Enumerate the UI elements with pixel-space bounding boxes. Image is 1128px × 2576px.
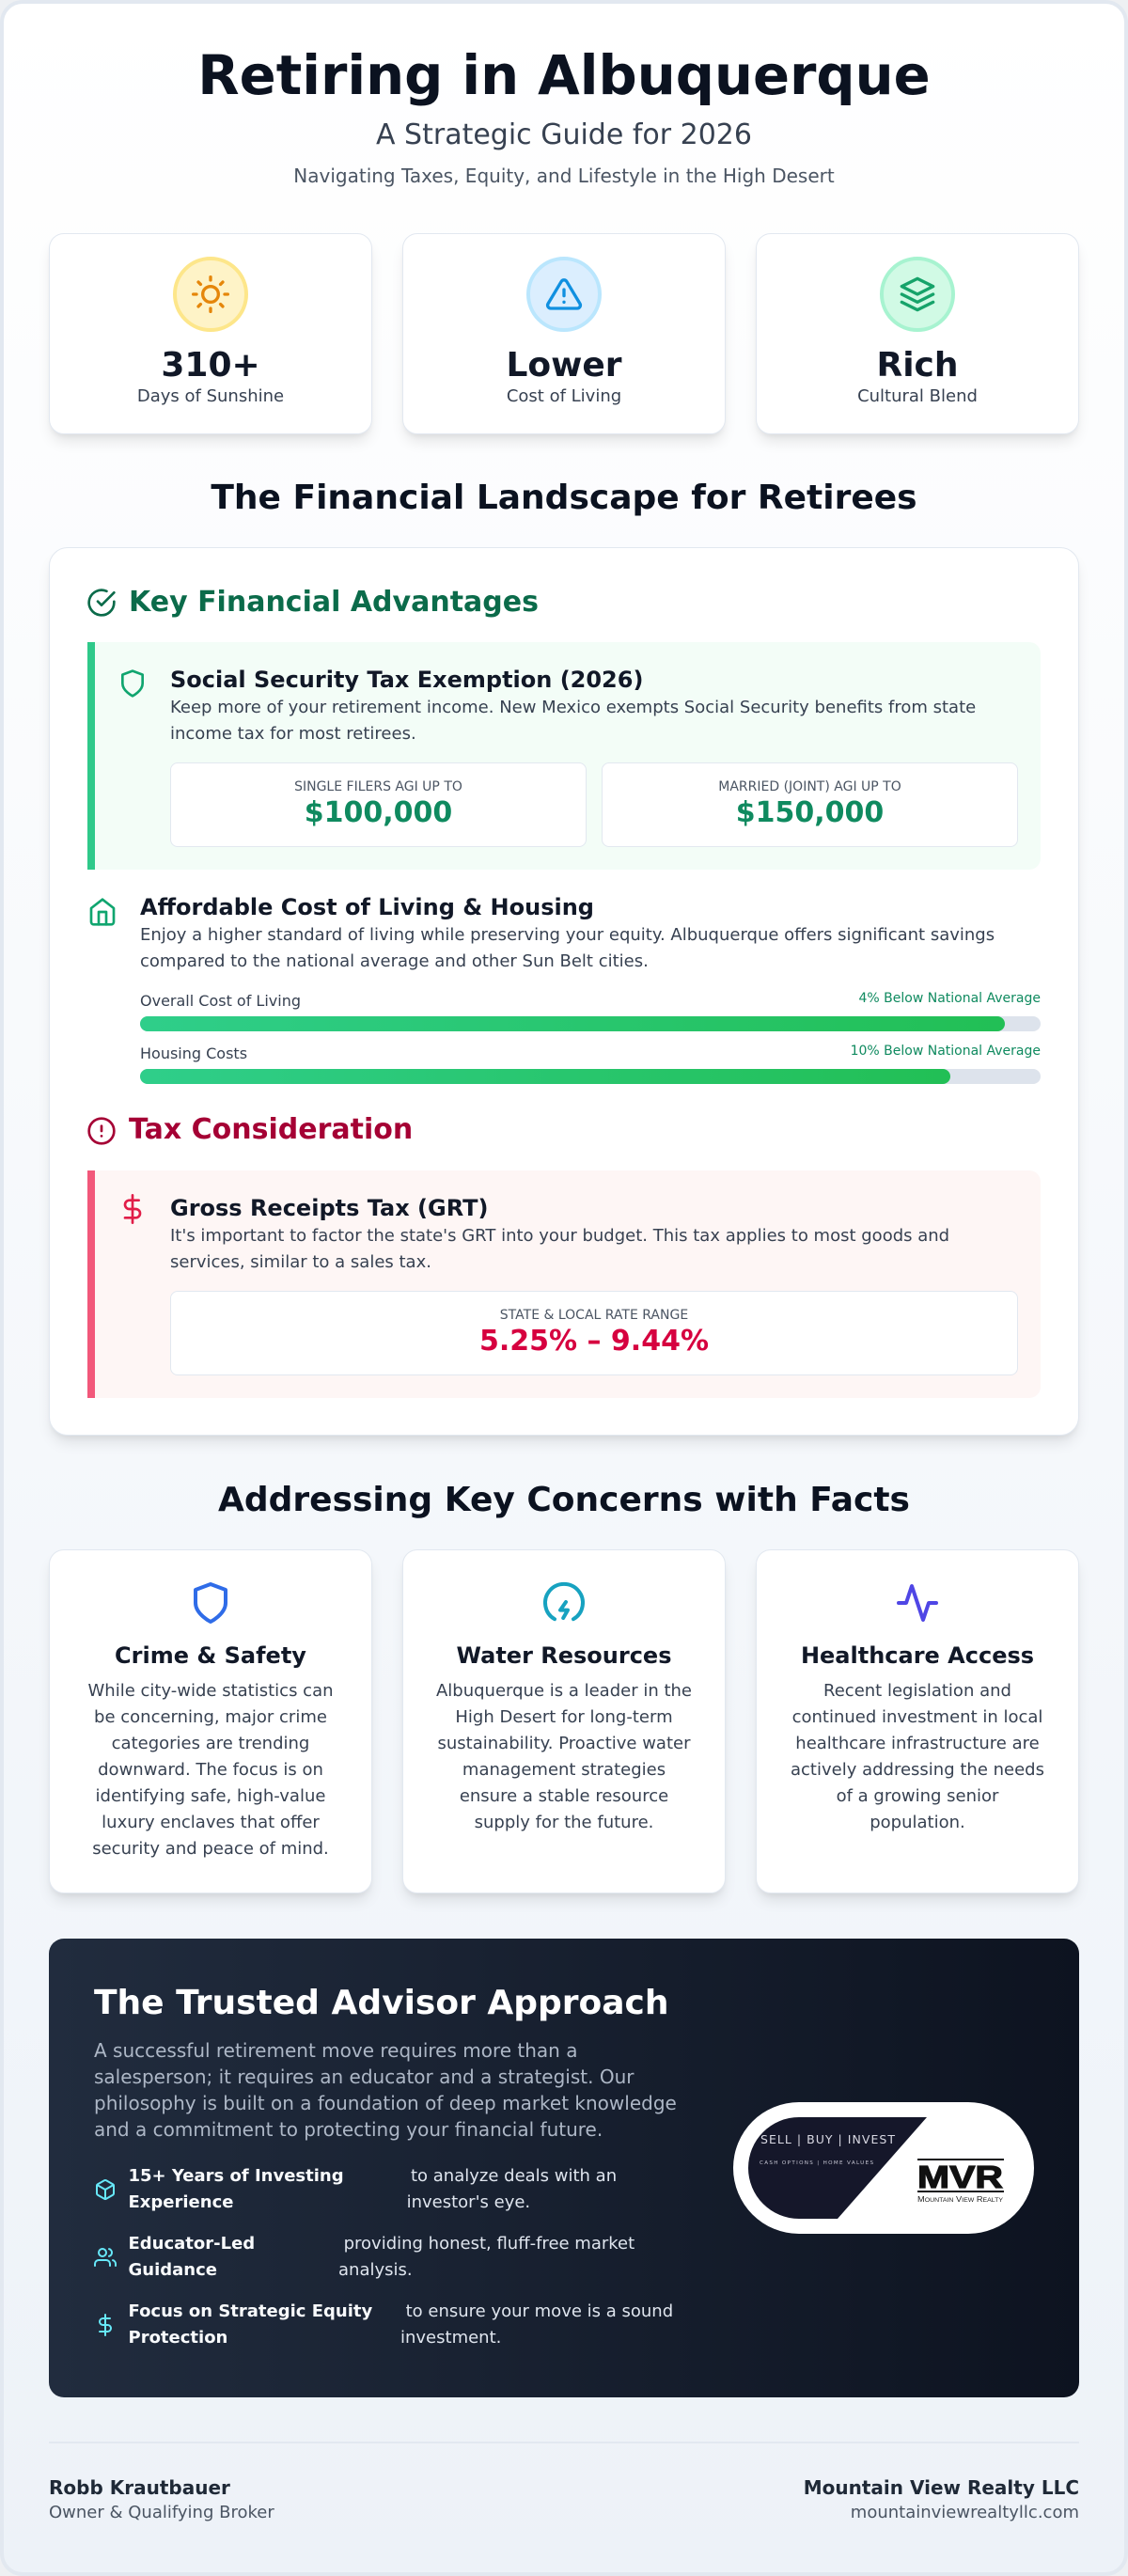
bold text: Focus on Strategic Equity	[128, 2301, 372, 2321]
icon: layers	[880, 257, 955, 332]
panel: sunshine stat	[49, 233, 372, 434]
bold text	[128, 2234, 255, 2280]
text: investment.	[400, 2328, 501, 2348]
card text: healthcare: actively addressing the needs	[791, 1760, 1044, 1780]
text	[338, 2234, 634, 2280]
bar label: housing: Housing Costs	[140, 1045, 247, 1062]
bold text: Protection	[128, 2328, 227, 2348]
text: analysis.	[338, 2260, 413, 2280]
icon: check circle	[87, 589, 116, 617]
heading: financial landscape: The Financial Landscape for Retirees	[211, 479, 917, 517]
panel: social security exemption	[87, 642, 1041, 870]
logo: mountain view realty: SELL | BUY | INVEST	[760, 2132, 895, 2146]
card text: crime: be concerning, major crime	[94, 1707, 327, 1727]
label: married joint: MARRIED (JOINT) AGI UP TO	[718, 779, 901, 794]
card text: crime: downward. The focus is on	[98, 1760, 323, 1780]
bar: overall cost 96%	[140, 1016, 1041, 1031]
logo: mountain view realty: Mountain View Realty	[917, 2195, 1003, 2204]
logo: mountain view realty: MVR	[917, 2160, 1003, 2194]
panel: cost of living stat	[402, 233, 726, 434]
bold text: Guidance	[128, 2260, 217, 2280]
card text: healthcare: population.	[870, 1813, 965, 1832]
icon: alert circle	[87, 1117, 116, 1145]
bar: housing 90%	[140, 1069, 1041, 1084]
icon: sun	[173, 257, 248, 332]
icon: shield	[121, 669, 144, 698]
card text: crime: While city-wide statistics can	[87, 1681, 334, 1701]
icon: water power	[543, 1581, 585, 1621]
footer: broker	[49, 2476, 274, 2522]
bar value: 4% below: 4% Below National Average	[858, 991, 1041, 1006]
description: grt: services, similar to a sales tax.	[170, 1252, 431, 1272]
icon: dollar sign	[124, 1194, 141, 1224]
value: $100,000: $100,000	[305, 796, 452, 829]
card text: healthcare: Recent legislation and	[823, 1681, 1011, 1701]
text	[400, 2301, 673, 2348]
subheading: affordable cost of living: Affordable Cost of Living & Housing	[140, 894, 594, 920]
broker name: Robb Krautbauer	[49, 2476, 230, 2499]
paragraph: philosophy	[94, 2039, 677, 2141]
text: to ensure your move is a sound	[406, 2301, 673, 2321]
description: social security: Keep more of your retirement income. New Mexico exempts Social Security benefits from state	[170, 698, 976, 717]
description: cost of living	[140, 925, 995, 971]
company name: Mountain View Realty LLC	[804, 2476, 1079, 2499]
stat label: cost of living: Cost of Living	[507, 386, 621, 406]
heading: trusted advisor: The Trusted Advisor Approach	[94, 1984, 669, 2022]
value: rate range: 5.25% – 9.44%	[479, 1325, 709, 1358]
card text: water: Albuquerque is a leader in the	[436, 1681, 692, 1701]
card title: water: Water Resources	[457, 1642, 671, 1669]
icon: shield blue	[194, 1582, 227, 1624]
card title: healthcare: Healthcare Access	[801, 1642, 1034, 1669]
icon: dollar	[99, 2314, 112, 2336]
stat value: lower: Lower	[506, 346, 622, 385]
panel: crime and safety	[49, 1549, 372, 1893]
logo: mountain view realty: CASH OPTIONS | HOME VALUES	[760, 2160, 873, 2166]
bold text: Educator-Led	[128, 2234, 255, 2254]
stat value: rich: Rich	[876, 346, 959, 385]
subheading: social security: Social Security Tax Exemption (2026)	[170, 667, 643, 693]
stat box: single filers	[170, 762, 587, 847]
website: mountainviewrealtyllc.com	[851, 2503, 1079, 2522]
stat box: rate range	[170, 1291, 1018, 1375]
paragraph: philosophy: A successful retirement move requires more than a	[94, 2039, 577, 2062]
card text: healthcare: continued investment in local	[792, 1707, 1042, 1727]
footer: company	[804, 2476, 1079, 2522]
heading: key concerns: Addressing Key Concerns with Facts	[218, 1481, 910, 1519]
text	[407, 2166, 617, 2212]
bold text: Experience	[128, 2192, 233, 2212]
paragraph: philosophy: philosophy is built on a foundation of deep market knowledge	[94, 2092, 677, 2114]
value: $150,000: $150,000	[736, 796, 884, 829]
divider	[49, 2442, 1079, 2443]
heading: tax consideration: Tax Consideration	[129, 1113, 413, 1146]
description: cost of living: compared to the national average and other Sun Belt cities.	[140, 951, 649, 971]
card text: water: ensure a stable resource	[460, 1786, 668, 1806]
heading: key financial advantages: Key Financial Advantages	[129, 586, 539, 619]
bar value: 10% below: 10% Below National Average	[851, 1044, 1041, 1059]
description: grt: It's important to factor the state's GRT into your budget. This tax applies to most goods and	[170, 1226, 949, 1246]
subheading: grt: Gross Receipts Tax (GRT)	[170, 1195, 488, 1221]
card text: crime: luxury enclaves that offer	[102, 1813, 320, 1832]
paragraph: philosophy: and a commitment to protecting your financial future.	[94, 2118, 603, 2141]
card text: crime: categories are trending	[112, 1734, 309, 1753]
tagline: Navigating Taxes, Equity, and Lifestyle in the High Desert	[293, 165, 835, 187]
card text: healthcare: of a growing senior	[837, 1786, 998, 1806]
paragraph: philosophy: salesperson; it requires an educator and a strategist. Our	[94, 2066, 634, 2088]
card text: water	[436, 1681, 692, 1832]
text: investor's eye.	[407, 2192, 530, 2212]
label: single filers: SINGLE FILERS AGI UP TO	[294, 779, 462, 794]
panel: water resources	[402, 1549, 726, 1893]
card text: water: supply for the future.	[475, 1813, 653, 1832]
card text: crime: identifying safe, high-value	[96, 1786, 325, 1806]
icon: box	[96, 2179, 115, 2200]
stat label: cultural blend: Cultural Blend	[857, 386, 978, 406]
stat box: married joint	[602, 762, 1018, 847]
stat label: days of sunshine: Days of Sunshine	[137, 386, 284, 406]
text: to analyze deals with an	[411, 2166, 617, 2186]
card text: healthcare: healthcare infrastructure are	[795, 1734, 1040, 1753]
card text: water: High Desert for long-term	[455, 1707, 673, 1727]
card title: crime: Crime & Safety	[115, 1642, 306, 1669]
text: providing honest, fluff-free market	[344, 2234, 634, 2254]
subtitle: A Strategic Guide for 2026	[376, 118, 752, 151]
panel: gross receipts tax	[87, 1170, 1041, 1398]
stat value: 310+: 310+	[161, 346, 260, 385]
description: social security: income tax for most retirees.	[170, 724, 416, 744]
header	[197, 44, 931, 187]
icon: home	[90, 898, 115, 926]
card text: water: sustainability. Proactive water	[438, 1734, 690, 1753]
panel: financial details	[49, 547, 1079, 1436]
broker title: Owner & Qualifying Broker	[49, 2503, 274, 2522]
card text: water: management strategies	[462, 1760, 666, 1780]
logo: mountain view realty	[733, 2102, 1034, 2234]
icon: activity	[897, 1584, 938, 1622]
icon: users	[94, 2248, 117, 2267]
card text: crime: security and peace of mind.	[92, 1839, 329, 1859]
bold text	[128, 2301, 372, 2348]
icon: warning triangle	[526, 257, 602, 332]
list item: educator led	[94, 2234, 634, 2280]
description: grt	[170, 1226, 949, 1272]
card text: healthcare	[791, 1681, 1044, 1832]
list item: investing experience	[96, 2166, 617, 2212]
description: social security	[170, 698, 976, 744]
description: cost of living: Enjoy a higher standard of living while preserving your equity. Albuquerque offers significant savings	[140, 925, 995, 945]
label: state and local: STATE & LOCAL RATE RANGE	[500, 1308, 688, 1323]
bold text	[128, 2166, 344, 2212]
card text: crime	[87, 1681, 334, 1859]
bold text: 15+ Years of Investing	[128, 2166, 344, 2186]
list item: strategic equity	[99, 2301, 673, 2348]
panel: cultural blend stat	[756, 233, 1079, 434]
panel: healthcare access	[756, 1549, 1079, 1893]
bar label: overall cost: Overall Cost of Living	[140, 992, 301, 1010]
panel: trusted advisor	[49, 1939, 1079, 2397]
title: Retiring in Albuquerque	[197, 44, 931, 107]
